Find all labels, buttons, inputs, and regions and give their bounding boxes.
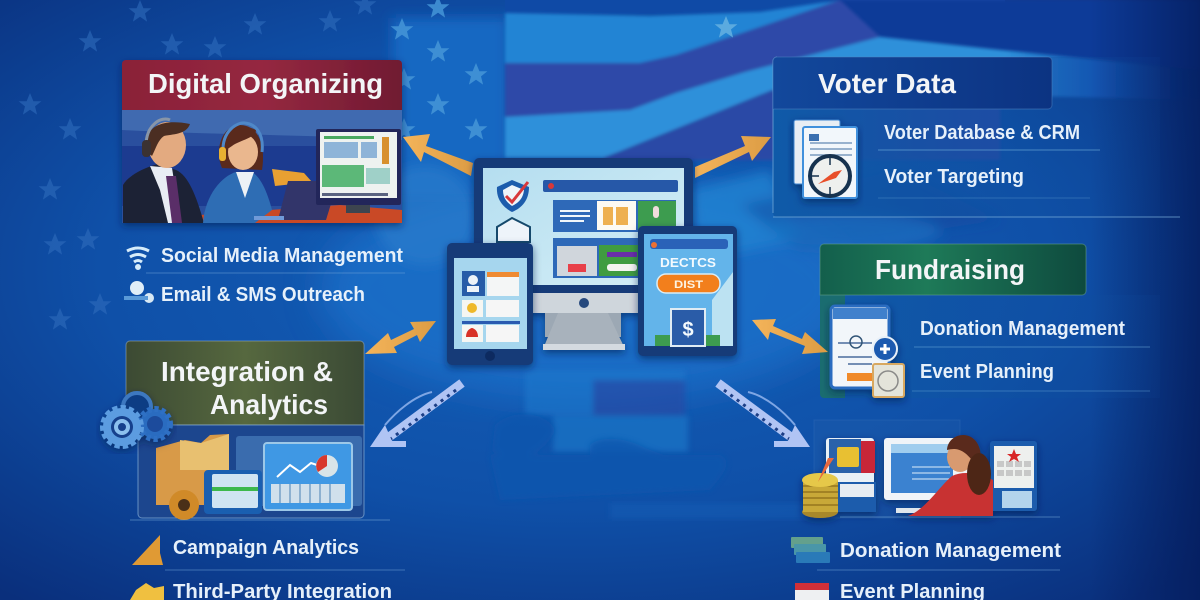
label: tablet headline: DECTCS: [660, 255, 716, 270]
panel: digital organizing: [122, 60, 402, 223]
device: desktop monitor: [474, 158, 693, 350]
title: digital organizing: Digital Organizing: [148, 68, 383, 99]
arrow: to digital organizing: [403, 134, 473, 176]
list: digital organizing features: [124, 245, 405, 306]
central glow: [320, 180, 860, 400]
lower flag and hands: [490, 370, 810, 519]
arrow: integration two-way: [365, 321, 436, 354]
title: integration and analytics: Analytics: [210, 389, 328, 420]
heading bar: voter data: [773, 57, 1052, 109]
monitor: [316, 129, 401, 205]
illustration: campaign staff at desk: [122, 110, 402, 223]
icon: stacked cards: [791, 537, 830, 563]
title: integration and analytics: [161, 356, 333, 420]
right edge shade: [1090, 0, 1200, 600]
woman: [203, 172, 272, 223]
icon: integration puzzle: [130, 583, 164, 600]
stars: [19, 0, 376, 330]
arrow: to voter data: [695, 136, 771, 178]
icon: donation form and badge: [831, 306, 904, 397]
text: event planning: Event Planning: [920, 361, 1054, 383]
icon: email and chat: [124, 281, 154, 303]
laptop: [278, 181, 338, 220]
flag stripes: [505, 0, 1200, 170]
button: orange: DIST: [674, 279, 703, 291]
panel: integration and analytics: [103, 341, 364, 520]
heading bar: fundraising: [820, 244, 1086, 295]
title: integration and analytics: Integration &: [161, 356, 333, 387]
panel: fundraising: [820, 244, 1160, 398]
icon: analytics puzzle: [132, 535, 163, 565]
text: donation management: Donation Management: [840, 540, 1061, 562]
text: campaign analytics: Campaign Analytics: [173, 537, 359, 559]
illustration: monitors, coins and worker: [802, 435, 1037, 518]
label: dollar sign: $: [682, 319, 694, 341]
heading bar: digital organizing: [122, 60, 402, 110]
text: voter targeting: Voter Targeting: [884, 166, 1024, 188]
icon: wifi: [127, 248, 149, 268]
text: donation management: Donation Management: [920, 318, 1125, 340]
icon: check badge: [497, 180, 529, 212]
arrow: ruler to donation panel: [718, 383, 810, 447]
devices: central monitor and tablets: [447, 158, 737, 365]
device: left tablet: [447, 243, 533, 365]
device: right tablet: [638, 226, 737, 356]
text: social media management: Social Media Management: [161, 245, 403, 267]
flag field: [392, 18, 507, 198]
title: voter data: Voter Data: [818, 68, 956, 99]
icon: calendar: [795, 583, 829, 600]
icon: gears: [103, 393, 170, 446]
text: email and sms outreach: Email & SMS Outreach: [161, 284, 365, 306]
icon: clipboard badge: [497, 218, 530, 242]
panel: voter data: [773, 57, 1180, 217]
icon: documents and target: [794, 120, 857, 198]
title: fundraising: Fundraising: [875, 254, 1025, 285]
arrow: fundraising two-way: [752, 319, 828, 354]
panel: event and donation workstation: [802, 420, 1060, 518]
list: donation and event features: [791, 537, 1061, 600]
heading bar: integration and analytics: [126, 341, 364, 425]
illustration: analytics dashboards: [138, 425, 364, 520]
megaphone: [272, 169, 312, 186]
man: [123, 164, 204, 223]
text: voter database and crm: Voter Database & CRM: [884, 122, 1080, 144]
flag continuation beside devices: [375, 165, 1000, 265]
arrow: ruler to analytics: [370, 383, 462, 447]
list: integration features: [130, 520, 405, 600]
dark upper right corner: [745, 0, 1200, 72]
